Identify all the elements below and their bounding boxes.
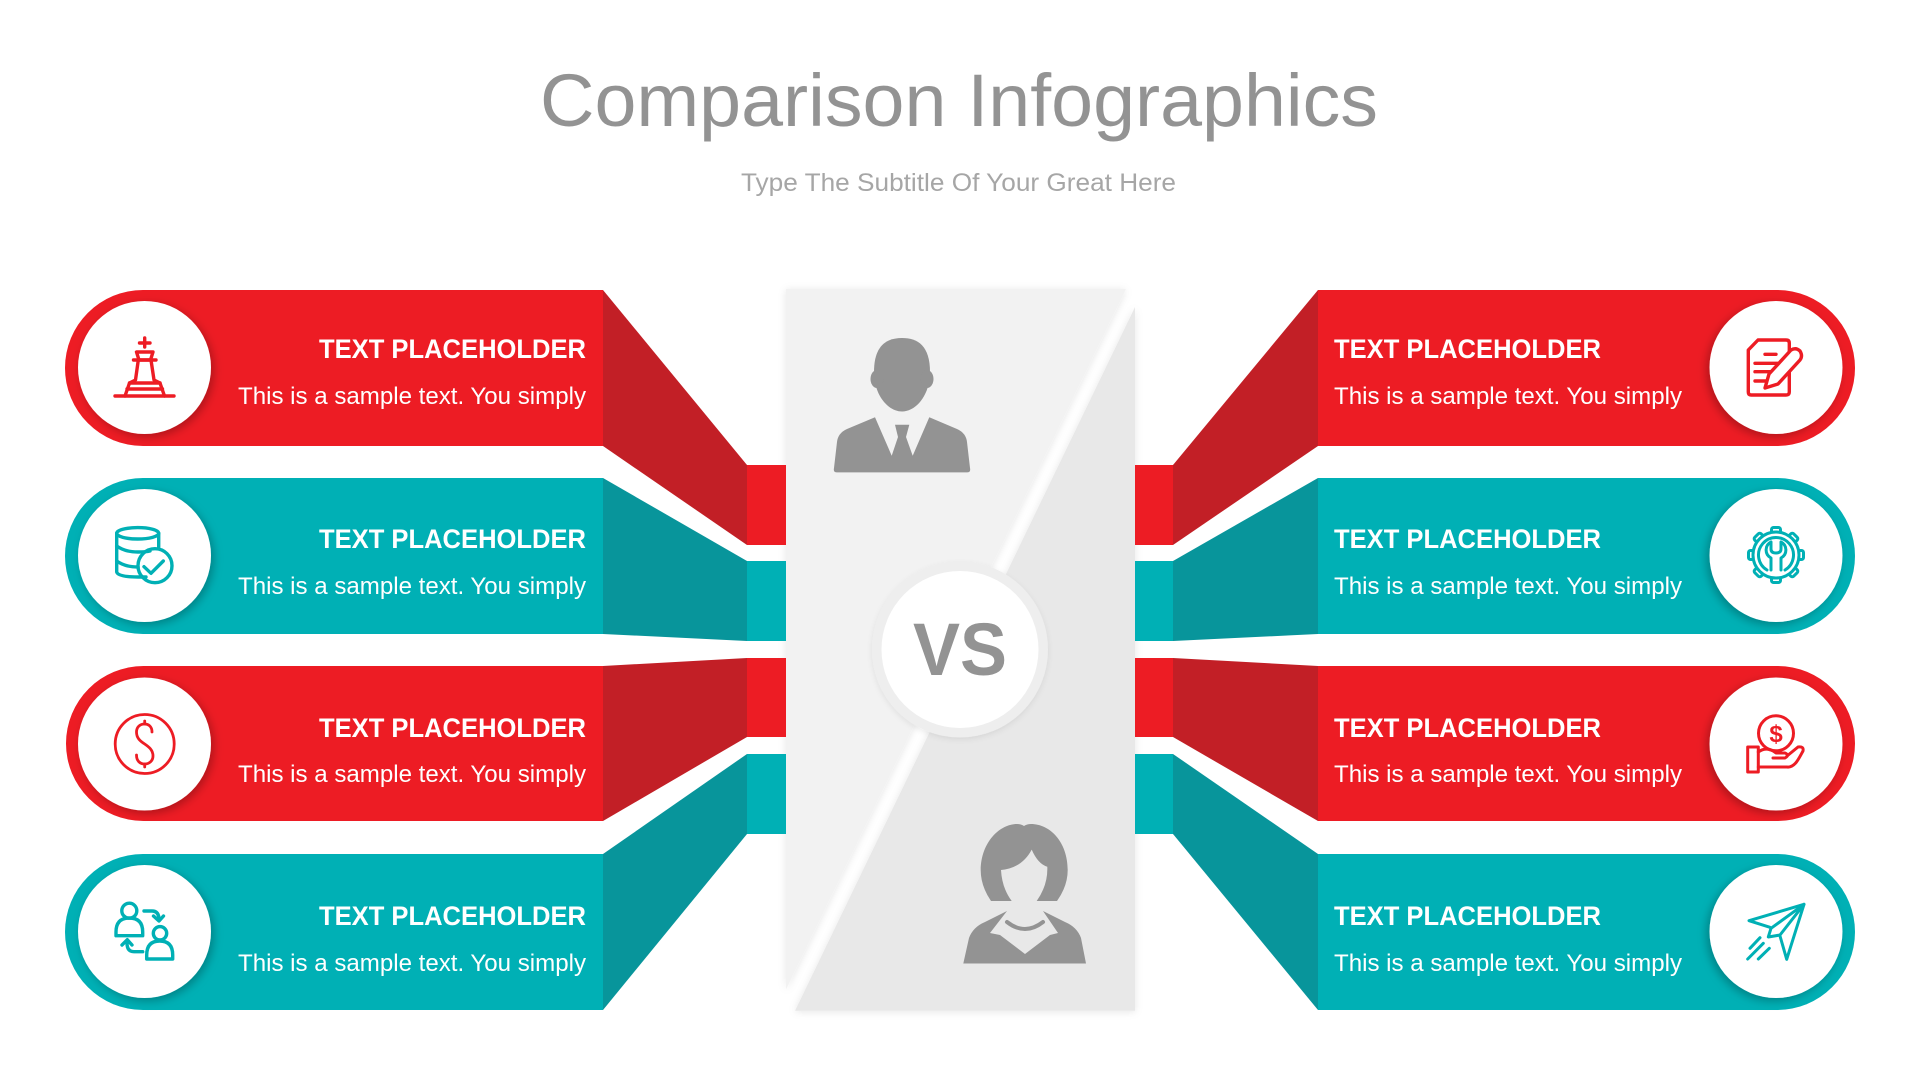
icon: businessman [834,338,970,472]
row 4 left: teal [65,754,786,1010]
icon: gear with wrench [1748,528,1804,582]
row 3 right: red: This is a sample text. You simply [1334,761,1682,788]
row 2 left: teal: TEXT PLACEHOLDER [319,524,586,554]
row 4 right: teal: TEXT PLACEHOLDER [1334,901,1601,931]
row 2 right: teal [1135,478,1855,641]
title: Comparison Infographics [540,59,1378,142]
row 1 left: red [65,290,786,545]
row 3 right: red [1135,658,1855,821]
row 1 right: red: This is a sample text. You simply [1334,383,1682,410]
icon: document and pen [1748,340,1802,395]
VS badge [872,562,1048,738]
panel: central comparison card [786,289,1135,1011]
row 3 left: red: This is a sample text. You simply [238,761,586,788]
row 1 right: red: TEXT PLACEHOLDER [1334,334,1601,364]
row 4 left: teal: This is a sample text. You simply [238,950,586,977]
icon: dollar coin [115,714,174,774]
row 1 right: red [1135,290,1855,545]
icon: people exchange [116,903,173,959]
icon: database check [117,528,172,583]
row 3 left: red [66,658,786,821]
row 4 right: teal: This is a sample text. You simply [1334,950,1682,977]
row 4 left: teal: TEXT PLACEHOLDER [319,901,586,931]
row 4 right: teal [1135,754,1855,1010]
row 2 left: teal: This is a sample text. You simply [238,573,586,600]
icon: paper plane [1748,904,1804,959]
row 1 left: red: This is a sample text. You simply [238,383,586,410]
icon: hand holding coin: $ [1769,721,1783,748]
row 2 left: teal [65,478,786,641]
VS badge: VS [913,608,1007,691]
subtitle: Type The Subtitle Of Your Great Here [741,169,1176,197]
row 1 left: red: TEXT PLACEHOLDER [319,334,586,364]
row 3 right: red: TEXT PLACEHOLDER [1334,713,1601,743]
icon: chess king [115,338,174,396]
row 2 right: teal: TEXT PLACEHOLDER [1334,524,1601,554]
row 3 left: red: TEXT PLACEHOLDER [319,713,586,743]
row 2 right: teal: This is a sample text. You simply [1334,573,1682,600]
icon: hand holding coin [1748,716,1803,772]
icon: businesswoman [963,824,1086,964]
